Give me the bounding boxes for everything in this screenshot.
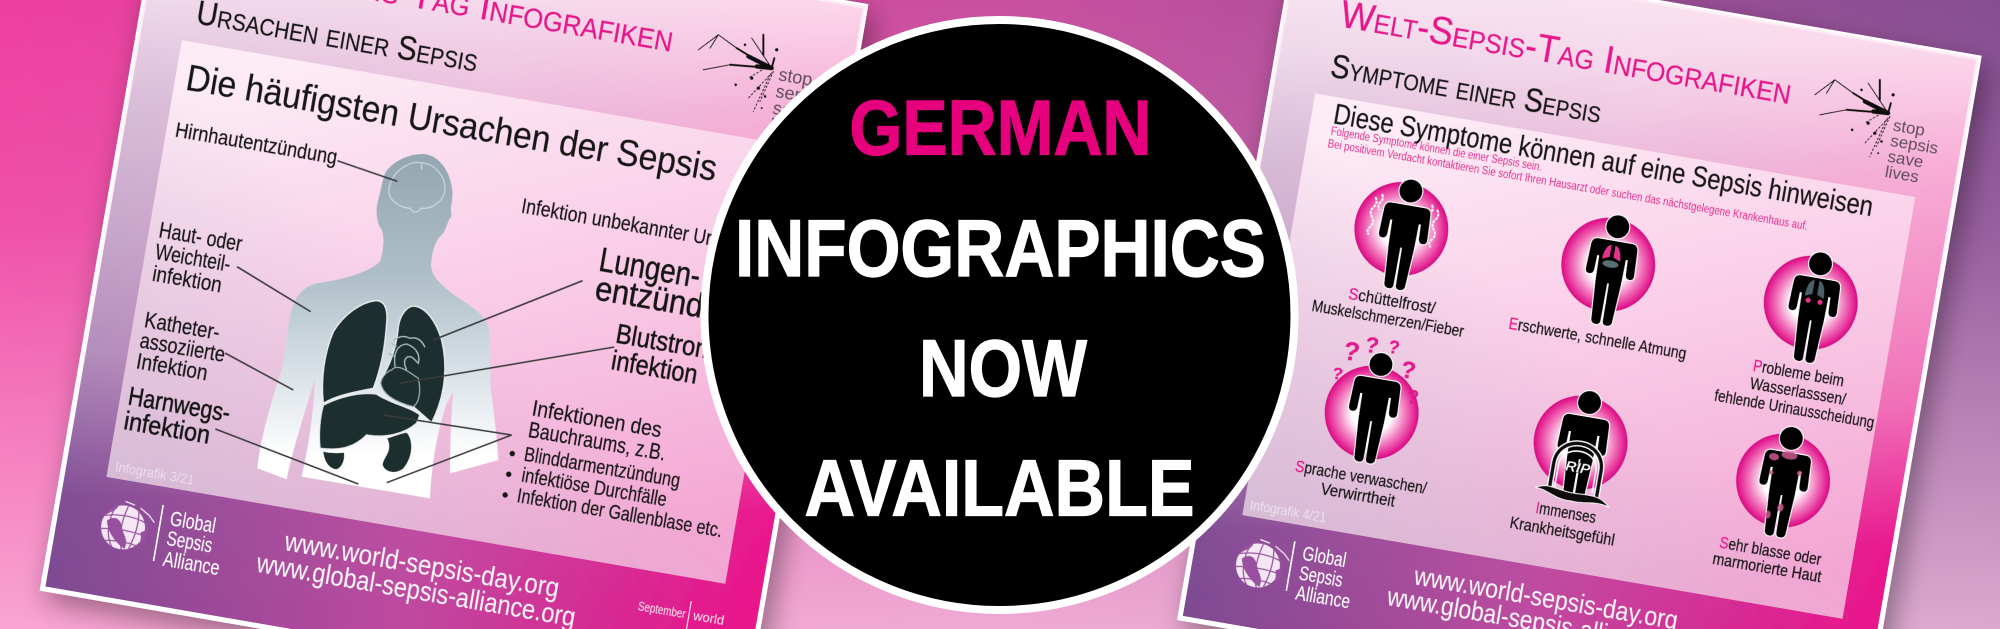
body diagram [215, 154, 614, 498]
icon: question marks: ? [1363, 332, 1381, 359]
label: pneumonia: Lungen- [596, 241, 703, 296]
icon: pink lungs [1601, 244, 1623, 269]
heading: Diese Symptome können auf eine Sepsis hinweisen [1331, 99, 1876, 223]
label: catheter infection [134, 307, 231, 388]
symptom: pale marbled skin [1711, 417, 1846, 586]
icon: question marks: ? [1405, 387, 1420, 409]
label: bloodstream infection: Blutstrom- [614, 318, 725, 367]
left lung [322, 301, 387, 403]
heading: Die häufigsten Ursachen der Sepsis [183, 57, 720, 189]
label: skin infection: infektion [151, 261, 224, 297]
content panel [1242, 93, 1915, 619]
icon: stop sepsis splatter [698, 35, 778, 111]
icon: question marks [1329, 327, 1428, 409]
logo: Global Sepsis Alliance: Sepsis [165, 527, 214, 558]
icon: shivering lines [1367, 193, 1440, 248]
text: NOW: NOW [919, 324, 1087, 414]
warning note: Folgende Symptome können die einer Sepsis sein. [1330, 126, 1543, 174]
logo: Global Sepsis Alliance: Sepsis [1297, 563, 1344, 592]
label [1291, 457, 1428, 516]
stop sepsis save lives slogan: stop [1892, 116, 1926, 140]
infographic number: Infografik 3/21 [114, 458, 196, 488]
label: pneumonia: entzündung [592, 270, 757, 334]
label: Verwirrtheit [1319, 479, 1397, 511]
stop sepsis save lives slogan [1884, 116, 1942, 189]
label [1713, 350, 1882, 432]
label: skin infection: Weichteil- [153, 239, 233, 277]
symptom: confusion [1291, 324, 1451, 516]
logo: World Sepsis Day: September [637, 598, 687, 621]
logo: Global Sepsis Alliance: Alliance [1294, 582, 1352, 614]
icon: question marks: ? [1399, 356, 1418, 385]
label: bloodstream infection [609, 318, 725, 393]
label [1508, 494, 1619, 550]
label: Sprache verwaschen/ [1294, 457, 1428, 498]
label: abdominal infections list: infektiöse Durchfälle [520, 465, 668, 511]
heart [381, 367, 420, 407]
label: Schüttelfrost/ [1347, 284, 1437, 318]
logo: World Sepsis Day: world [691, 608, 725, 628]
icon: skin patches [1759, 448, 1805, 523]
stop sepsis save lives slogan: lives [768, 115, 807, 141]
lower liver lobe [323, 452, 344, 469]
label: urinary tract infection: infektion [122, 405, 213, 450]
icon: question marks: ? [1387, 337, 1401, 358]
website links: www.world-sepsis-day.org [282, 525, 562, 603]
label: meningitis: Hirnhautentzündung [174, 119, 339, 169]
stop sepsis save lives slogan: stop [777, 65, 814, 90]
body silhouette [257, 154, 498, 498]
symptom: chills [1310, 166, 1488, 341]
icon: globe [1232, 536, 1292, 592]
label: Erschwerte, schnelle Atmung [1507, 314, 1688, 363]
icon: tombstone [1534, 437, 1619, 508]
logo: Global Sepsis Alliance [94, 495, 229, 580]
logo: Global Sepsis Alliance: Global [1301, 543, 1348, 572]
icon: question marks: ? [1331, 364, 1344, 384]
text: INFOGRAPHICS: INFOGRAPHICS [735, 204, 1266, 294]
logo: Global Sepsis Alliance [1230, 532, 1359, 614]
label: unknown infection: Infektion unbekannter Ursache [520, 195, 760, 258]
text: GERMAN: GERMAN [850, 84, 1152, 172]
label: skin infection [150, 217, 244, 300]
label: skin infection: Haut- oder [157, 217, 244, 256]
label: Krankheitsgefühl [1508, 513, 1616, 550]
panel: left infographic card, causes of sepsis [42, 0, 866, 629]
warning note: Bei positivem Verdacht kontaktieren Sie sofort Ihren Hausarzt oder suchen das nächstgelegene Krankenhaus auf. [1327, 138, 1809, 233]
icon: lungs and kidneys [1804, 279, 1826, 305]
icon: question marks: ? [1341, 335, 1362, 367]
stop sepsis save lives slogan: sepsis [774, 81, 828, 110]
label: pneumonia [591, 241, 761, 334]
stop sepsis save lives slogan: save [1886, 147, 1925, 172]
infographic number: Infografik 4/21 [1249, 496, 1328, 525]
label: urinary tract infection: Harnwegs- [126, 381, 233, 428]
label: Immenses [1534, 498, 1598, 527]
label: abdominal infections list: Blinddarmentzündung [522, 444, 682, 492]
liver and stomach [319, 393, 420, 449]
label: catheter infection: Katheter- [143, 307, 222, 345]
warning note [1327, 125, 1811, 233]
symptom: urination problems [1713, 238, 1901, 432]
stop sepsis save lives slogan: lives [1884, 162, 1920, 187]
brain outline [389, 162, 445, 212]
label: abdominal infections list: Bauchraums, z.B. [527, 417, 668, 465]
label: abdominal infections list: Infektion der Gallenblase etc. [515, 485, 724, 542]
label: urinary tract infection [122, 381, 233, 452]
label: bloodstream infection: infektion [609, 344, 700, 390]
symptom: feeling very ill [1508, 381, 1639, 550]
label: fehlende Urinausscheidung [1713, 386, 1876, 432]
bowel [383, 433, 411, 472]
label: abdominal infections list: Infektionen des [530, 396, 664, 442]
label: Muskelschmerzen/Fieber [1310, 296, 1466, 341]
logo: Global Sepsis Alliance: Alliance [161, 548, 221, 580]
label: abdominal infections list [501, 393, 739, 542]
logo: World Sepsis Day [630, 592, 733, 629]
website links [254, 521, 582, 629]
aorta [388, 337, 425, 370]
subtitle: Symptome einer Sepsis [1328, 47, 1604, 130]
icon: globe [97, 498, 157, 554]
text: AVAILABLE: AVAILABLE [804, 444, 1194, 532]
stop sepsis save lives slogan: save [771, 98, 812, 124]
stop sepsis save lives slogan [768, 65, 831, 143]
right lung [380, 306, 445, 423]
callout: black circle announcement [704, 20, 1294, 610]
stop sepsis save lives slogan: sepsis [1889, 131, 1940, 158]
label: Sehr blasse oder [1718, 533, 1823, 569]
label: catheter infection: Infektion [134, 348, 210, 385]
label: Wasserlasssen/ [1749, 374, 1848, 409]
label [1310, 278, 1469, 341]
label: Probleme beim [1752, 356, 1846, 390]
label: marmorierte Haut [1711, 549, 1823, 586]
leader lines [215, 161, 614, 484]
label: catheter infection: assoziierte [138, 328, 227, 367]
icon: tombstone: RIP [1564, 457, 1592, 479]
logo: Global Sepsis Alliance: Global [168, 507, 217, 538]
content panel [106, 40, 801, 584]
symptom: rapid breathing [1507, 199, 1708, 363]
panel: right infographic card, symptoms of sepsis [1180, 0, 1979, 629]
icon: stop sepsis splatter [1815, 80, 1895, 156]
label [1711, 532, 1826, 586]
